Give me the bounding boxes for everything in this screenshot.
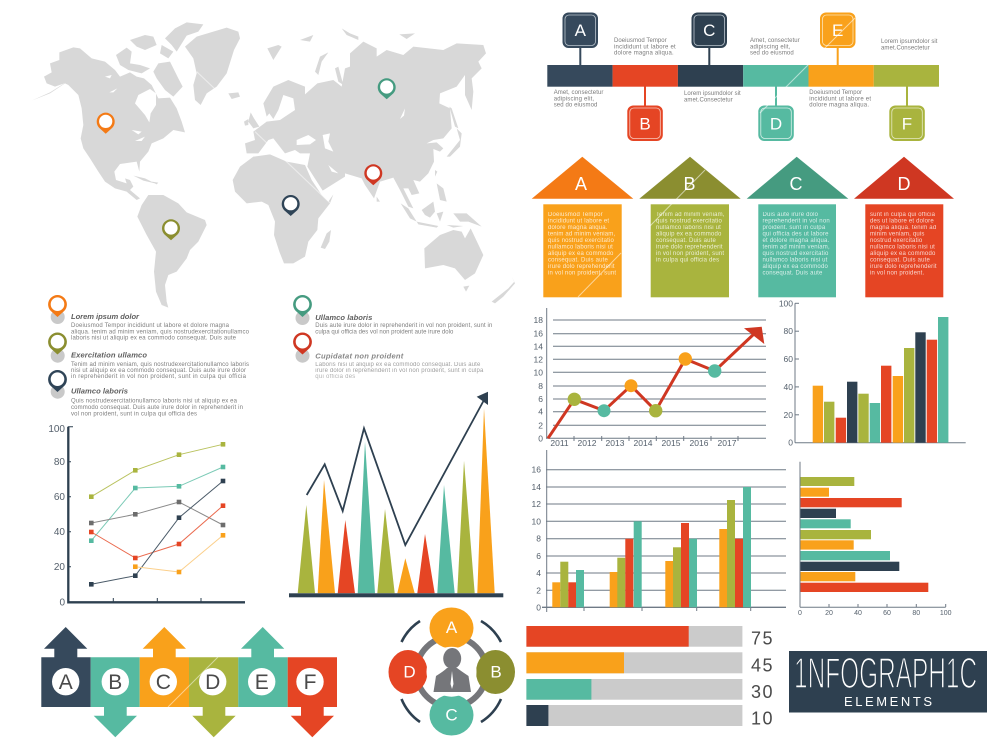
step D (189, 657, 238, 737)
house card D: in vol non proident. (870, 270, 924, 276)
timeline node E: E (832, 21, 843, 40)
house card D: D (898, 174, 910, 194)
group 3 (665, 523, 697, 607)
house card B: in culpa qui officia des (656, 257, 719, 263)
timeline node B (627, 86, 663, 141)
blob A (430, 608, 474, 648)
y axis labels: 0 (536, 602, 541, 612)
step A (41, 627, 91, 707)
axis labels: 0 (798, 610, 802, 617)
labels (403, 618, 502, 724)
house card C (747, 157, 848, 297)
arrow steps (41, 627, 337, 737)
house card B (639, 157, 741, 297)
house card A (532, 157, 633, 297)
japan and sakhalin (447, 107, 462, 157)
house card D: irure dolo reprehenderit (870, 264, 937, 270)
bar 75 (526, 626, 774, 648)
blob D (388, 650, 428, 694)
legend entry: lorem ipsum dolor: laboris nisi ut aliquip ex ea commodo consequat. Duis aute (71, 336, 237, 342)
y axis labels: 12 (534, 354, 543, 364)
grid and axes (542, 450, 786, 612)
step F (288, 657, 337, 737)
group 4 (719, 487, 751, 607)
house card C: Duis aute irure dolo (762, 212, 819, 218)
y axis labels (532, 465, 541, 612)
watermark lines on top (578, 18, 855, 297)
house card B: in vol non proident, sunt (656, 251, 724, 257)
multi-line chart (48, 424, 245, 608)
trend line (548, 333, 755, 438)
trend arrow line (307, 400, 484, 545)
house card B: irure dolo reprehenderit (656, 244, 723, 250)
inland seas (297, 108, 405, 173)
y axis labels: 6 (538, 394, 543, 404)
y axis labels: 14 (532, 482, 541, 492)
arrow head (744, 327, 764, 344)
y axis labels: 2 (538, 420, 543, 430)
great britain and ireland (244, 112, 259, 128)
house card D: consequat. Duis aute (870, 257, 930, 263)
year labels (550, 438, 737, 448)
house card A: nullamco laboris nisi ut (548, 244, 613, 250)
data points (568, 352, 721, 417)
indonesia and philippines (401, 183, 482, 228)
timeline captions: amet.Consectetur (684, 97, 733, 103)
axis labels: 60 (784, 354, 793, 364)
y labels: 40 (54, 527, 65, 538)
y axis labels: 6 (536, 551, 541, 561)
gray ring (416, 637, 486, 707)
y axis labels: 8 (536, 534, 541, 544)
house card D: aliquip ex ea commodo (870, 251, 936, 257)
legend entry: cupidatat non proident: qui officia des (315, 374, 355, 380)
y axis labels: 8 (538, 381, 543, 391)
house card D: sunt in culpa qui officia (870, 212, 936, 218)
house card B: Tenim ad minim veniam, (656, 212, 725, 218)
timeline captions: incididunt ut labore et (809, 96, 871, 102)
timeline captions: incididunt ut labore et (614, 44, 676, 50)
house card A: dolore magna aliqua. (548, 225, 608, 231)
y axis labels: 10 (532, 516, 541, 526)
house card C: reprehenderit in vol non (762, 218, 830, 224)
blob C (430, 694, 474, 736)
madagascar (321, 230, 331, 249)
timeline node D: D (770, 114, 782, 134)
house card C: et dolore magna aliqua. (762, 238, 830, 244)
timeline node D (758, 86, 794, 141)
axis labels: 100 (779, 298, 793, 308)
axis labels (798, 610, 952, 617)
timeline bar (547, 65, 939, 87)
group 2 (610, 521, 642, 607)
axis labels: 100 (940, 610, 952, 617)
timeline captions: dolore magna aliqua. (809, 103, 869, 109)
year labels: 2015 (662, 438, 681, 448)
axis labels: 40 (854, 610, 862, 617)
house card C: proident. sunt in culpa (762, 225, 826, 231)
baseline (289, 593, 503, 597)
timeline node B: B (639, 114, 651, 134)
house card B: nullamco laboris nisi ut (656, 225, 721, 231)
watermark lines on map (197, 72, 330, 203)
house card A: incididunt ut labore et (548, 218, 609, 224)
vertical bar chart right (779, 298, 966, 448)
legend entry: cupidatat non proident: Laboris nisi ut aliquip ex ea commodo consequat. Duis aute (315, 362, 481, 368)
labels: D (403, 662, 416, 682)
y axis labels: 14 (534, 341, 543, 351)
y axis labels: 16 (532, 465, 541, 475)
step E: E (255, 671, 269, 694)
bar 10: 10 (751, 708, 774, 728)
house card B: B (683, 174, 696, 194)
timeline captions: Lorem ipsumdolor sit (684, 91, 741, 97)
step C (140, 627, 189, 707)
legend entry: lorem ipsum dolor: Lorem ipsum dolor (71, 312, 140, 321)
legend entry: exercitation ullamco: nisi ut aliquip ex ea commodo consequat. Duis aute irure dolor (71, 368, 246, 374)
white center disc (426, 647, 476, 697)
legend entry: ullamco laboris right: Duis aute irure dolor in reprehenderit in vol non proident, sunt in (315, 323, 492, 329)
step C: C (156, 671, 171, 694)
north america (32, 47, 185, 200)
south america (137, 195, 207, 308)
legend entry: lorem ipsum dolor (48, 295, 250, 342)
bar 30: 30 (751, 682, 774, 702)
y labels (48, 424, 65, 608)
house card A: aliquip ex ea commodo (548, 251, 614, 257)
year labels: 2012 (578, 438, 597, 448)
house card D: nostrud exercitatio (870, 238, 923, 244)
hudson bay and great lakes (105, 75, 156, 141)
subtitle text: ELEMENTS (844, 694, 932, 709)
axis labels: 0 (788, 438, 793, 448)
timeline captions (554, 38, 938, 109)
title banner (789, 648, 987, 712)
legend entry: ullamco laboris left: Quis nostrudexercitationullamco laboris nisi ut aliquip ex ea (71, 399, 238, 405)
y labels: 60 (54, 492, 65, 503)
y labels: 0 (59, 598, 65, 608)
legend entry: cupidatat non proident: irure dolor in reprehenderit in vol non proident, sunt in culpa (315, 368, 484, 374)
legend entry: exercitation ullamco: Exercitation ullamco (71, 350, 147, 359)
caribbean islands (133, 176, 158, 184)
legend entry: exercitation ullamco: in reprehenderit in vol non proident, sunt in culpa qui officia (71, 374, 247, 380)
legend entry: ullamco laboris left (48, 370, 243, 417)
axis labels: 40 (784, 382, 793, 392)
iceland (228, 92, 240, 99)
y axis labels: 12 (532, 499, 541, 509)
map pin: navy (282, 195, 300, 216)
timeline captions: sed do eiusmod (750, 51, 794, 57)
timeline node C (692, 12, 727, 66)
step B (91, 657, 140, 737)
house card C: aliquip ex ea commodo (762, 264, 828, 270)
watermark line on arrow steps (168, 657, 218, 707)
australia (424, 228, 483, 280)
series: teal (89, 465, 225, 543)
bar 75: 75 (751, 628, 774, 648)
year labels: 2017 (718, 438, 737, 448)
series: navy (89, 479, 225, 587)
timeline captions: adipiscing elit, (554, 96, 594, 102)
series: olive (89, 442, 225, 499)
bars (800, 477, 928, 592)
y axis labels: 18 (534, 315, 543, 325)
series: red (89, 503, 225, 560)
outer arcs (402, 621, 501, 722)
blob B (476, 650, 515, 694)
timeline captions: sed do eiusmod (554, 103, 598, 109)
y labels: 20 (54, 562, 65, 573)
series: orange (133, 533, 225, 574)
greenland (185, 28, 240, 105)
legend entry: cupidatat non proident: Cupidatat non proident (315, 351, 404, 360)
axes (795, 303, 966, 443)
axis labels: 20 (784, 410, 793, 420)
world map (32, 22, 515, 308)
house card C: tenim ad minim veniam, (762, 244, 830, 250)
bar 30 (526, 679, 774, 702)
y axis labels: 16 (534, 329, 543, 339)
year labels: 2014 (634, 438, 653, 448)
title text: 1NFOGRAPH1C (794, 648, 977, 698)
series: gray (89, 500, 225, 527)
year labels: 2016 (690, 438, 709, 448)
africa (233, 154, 333, 263)
house card A: consequat. Duis aute (548, 257, 608, 263)
y axis labels: 4 (538, 407, 543, 417)
y axis labels: 10 (534, 367, 543, 377)
house card D: nullamco laboris nisi ut (870, 244, 935, 250)
house card A: irure dolo reprehenderit (548, 264, 615, 270)
house card C: consequat. Duis aute (762, 270, 823, 276)
horizontal bar chart (798, 462, 952, 617)
tasmania (463, 286, 469, 292)
step A: A (59, 671, 73, 694)
timeline captions: Amet, consectetur (750, 38, 800, 44)
sri lanka and taiwan (377, 170, 437, 202)
timeline node A: A (575, 21, 587, 40)
y labels: 80 (54, 457, 65, 468)
house card A: A (575, 174, 587, 194)
bars (813, 317, 948, 443)
house card D (854, 157, 954, 297)
legend entry: ullamco laboris left: commodo consequat. Duis aute irure dolor in reprehenderit in (71, 405, 243, 411)
timeline captions: Doeiusmod Tempor (614, 38, 667, 44)
step D: D (205, 671, 220, 694)
map pin: teal (378, 78, 396, 99)
spikes (298, 408, 495, 593)
house card B: aliquip ex ea commodo (656, 232, 722, 238)
eurasia (245, 42, 486, 208)
legend entry: ullamco laboris left: vol non proident, sunt in culpa qui officia des (71, 411, 197, 417)
year labels: 2013 (606, 438, 625, 448)
axis labels: 60 (883, 610, 891, 617)
timeline captions: Doeiusmod Tempor (809, 90, 862, 96)
timeline node F (889, 86, 925, 141)
timeline node F: F (902, 114, 912, 134)
map pin: orange (97, 113, 115, 134)
person icon (434, 648, 471, 692)
axis labels (779, 298, 793, 448)
timeline captions: adipiscing elit, (750, 44, 791, 50)
timeline node C: C (703, 21, 715, 40)
arctic archipelagos (267, 28, 415, 85)
legend entry: lorem ipsum dolor: Doeiusmod Tempor incididunt ut labore et dolore magna (71, 323, 230, 329)
axis labels: 80 (912, 610, 920, 617)
labels: C (445, 706, 458, 724)
y axis labels: 0 (538, 433, 543, 443)
line chart with arrow, years (534, 308, 766, 448)
canadian arctic islands (116, 22, 203, 97)
group 1 (552, 562, 584, 607)
year labels: 2011 (550, 438, 569, 448)
house card A: Doeiusmod Tempor (548, 212, 603, 218)
bar 45: 45 (751, 656, 774, 676)
legend entry: lorem ipsum dolor: aliqua. tenim ad minim veniam, quis nostrudexercitationullamco (71, 329, 250, 335)
gridlines and axis (546, 308, 766, 441)
timeline captions: Amet, consectetur (554, 90, 604, 96)
house card B: consequat. Duis aute (656, 238, 716, 244)
timeline captions: Lorem ipsumdolor sit (881, 39, 938, 45)
y axis labels: 4 (536, 568, 541, 578)
map pin: red (364, 164, 382, 185)
labels: B (490, 662, 502, 682)
step F: F (304, 671, 316, 694)
step E (238, 627, 288, 707)
labels: A (446, 618, 458, 637)
step B: B (108, 671, 122, 694)
house card D: minim veniam, quis (870, 232, 925, 238)
house card D: des ut labore et dolore (870, 218, 934, 224)
house card D: magna aliqua. tenim ad (870, 225, 936, 231)
house card B: quis nostrud exercitatio (656, 218, 723, 224)
spike chart (289, 392, 503, 597)
legend entry: ullamco laboris right (293, 295, 492, 335)
legend entry: ullamco laboris right: Ullamco laboris (315, 313, 372, 322)
house card A: tenim ad minim veniam, (548, 232, 615, 238)
timeline captions: dolore magna aliqua. (614, 51, 674, 57)
timeline (547, 12, 939, 141)
legend entry: exercitation ullamco (48, 333, 249, 380)
legend entry: ullamco laboris left: Ullamco laboris (71, 387, 128, 396)
axes (800, 462, 946, 607)
arrow head (477, 392, 488, 405)
timeline node A (562, 12, 598, 66)
axis labels: 20 (825, 610, 833, 617)
circular person diagram (388, 608, 515, 736)
y axis labels (534, 315, 543, 443)
legend entry: ullamco laboris right: culpa qui officia des vol non proident aute irure dolo (315, 329, 454, 335)
americas and greenland (32, 22, 240, 308)
house card C: C (790, 174, 802, 194)
timeline node E (820, 12, 856, 66)
grouped bar chart (532, 450, 786, 612)
bar 10 (526, 705, 774, 728)
bar 45 (526, 652, 774, 676)
house card A: in vol non proident, sunt (548, 270, 616, 276)
y labels: 100 (48, 424, 65, 435)
timeline captions: amet.Consectetur (881, 45, 930, 51)
house card C: quis nostrud exercitatio (762, 251, 829, 257)
africa, eurasia and oceania (233, 28, 515, 303)
house card C: qui officia des ut labore (762, 232, 829, 238)
new zealand (492, 277, 515, 303)
house card C: nullamco laboris nisi ut (762, 257, 828, 263)
legend entry: cupidatat non proident (293, 333, 484, 380)
house card A: quis nostrud exercitatio (548, 238, 615, 244)
progress bars (526, 626, 774, 728)
axis labels: 80 (784, 326, 793, 336)
legend entry: exercitation ullamco: Tenim ad minim veniam, quis nostrudexercitationullamco laboris (71, 362, 249, 368)
map pin: olive (162, 219, 180, 240)
axes (68, 427, 245, 602)
y axis labels: 2 (536, 585, 541, 595)
